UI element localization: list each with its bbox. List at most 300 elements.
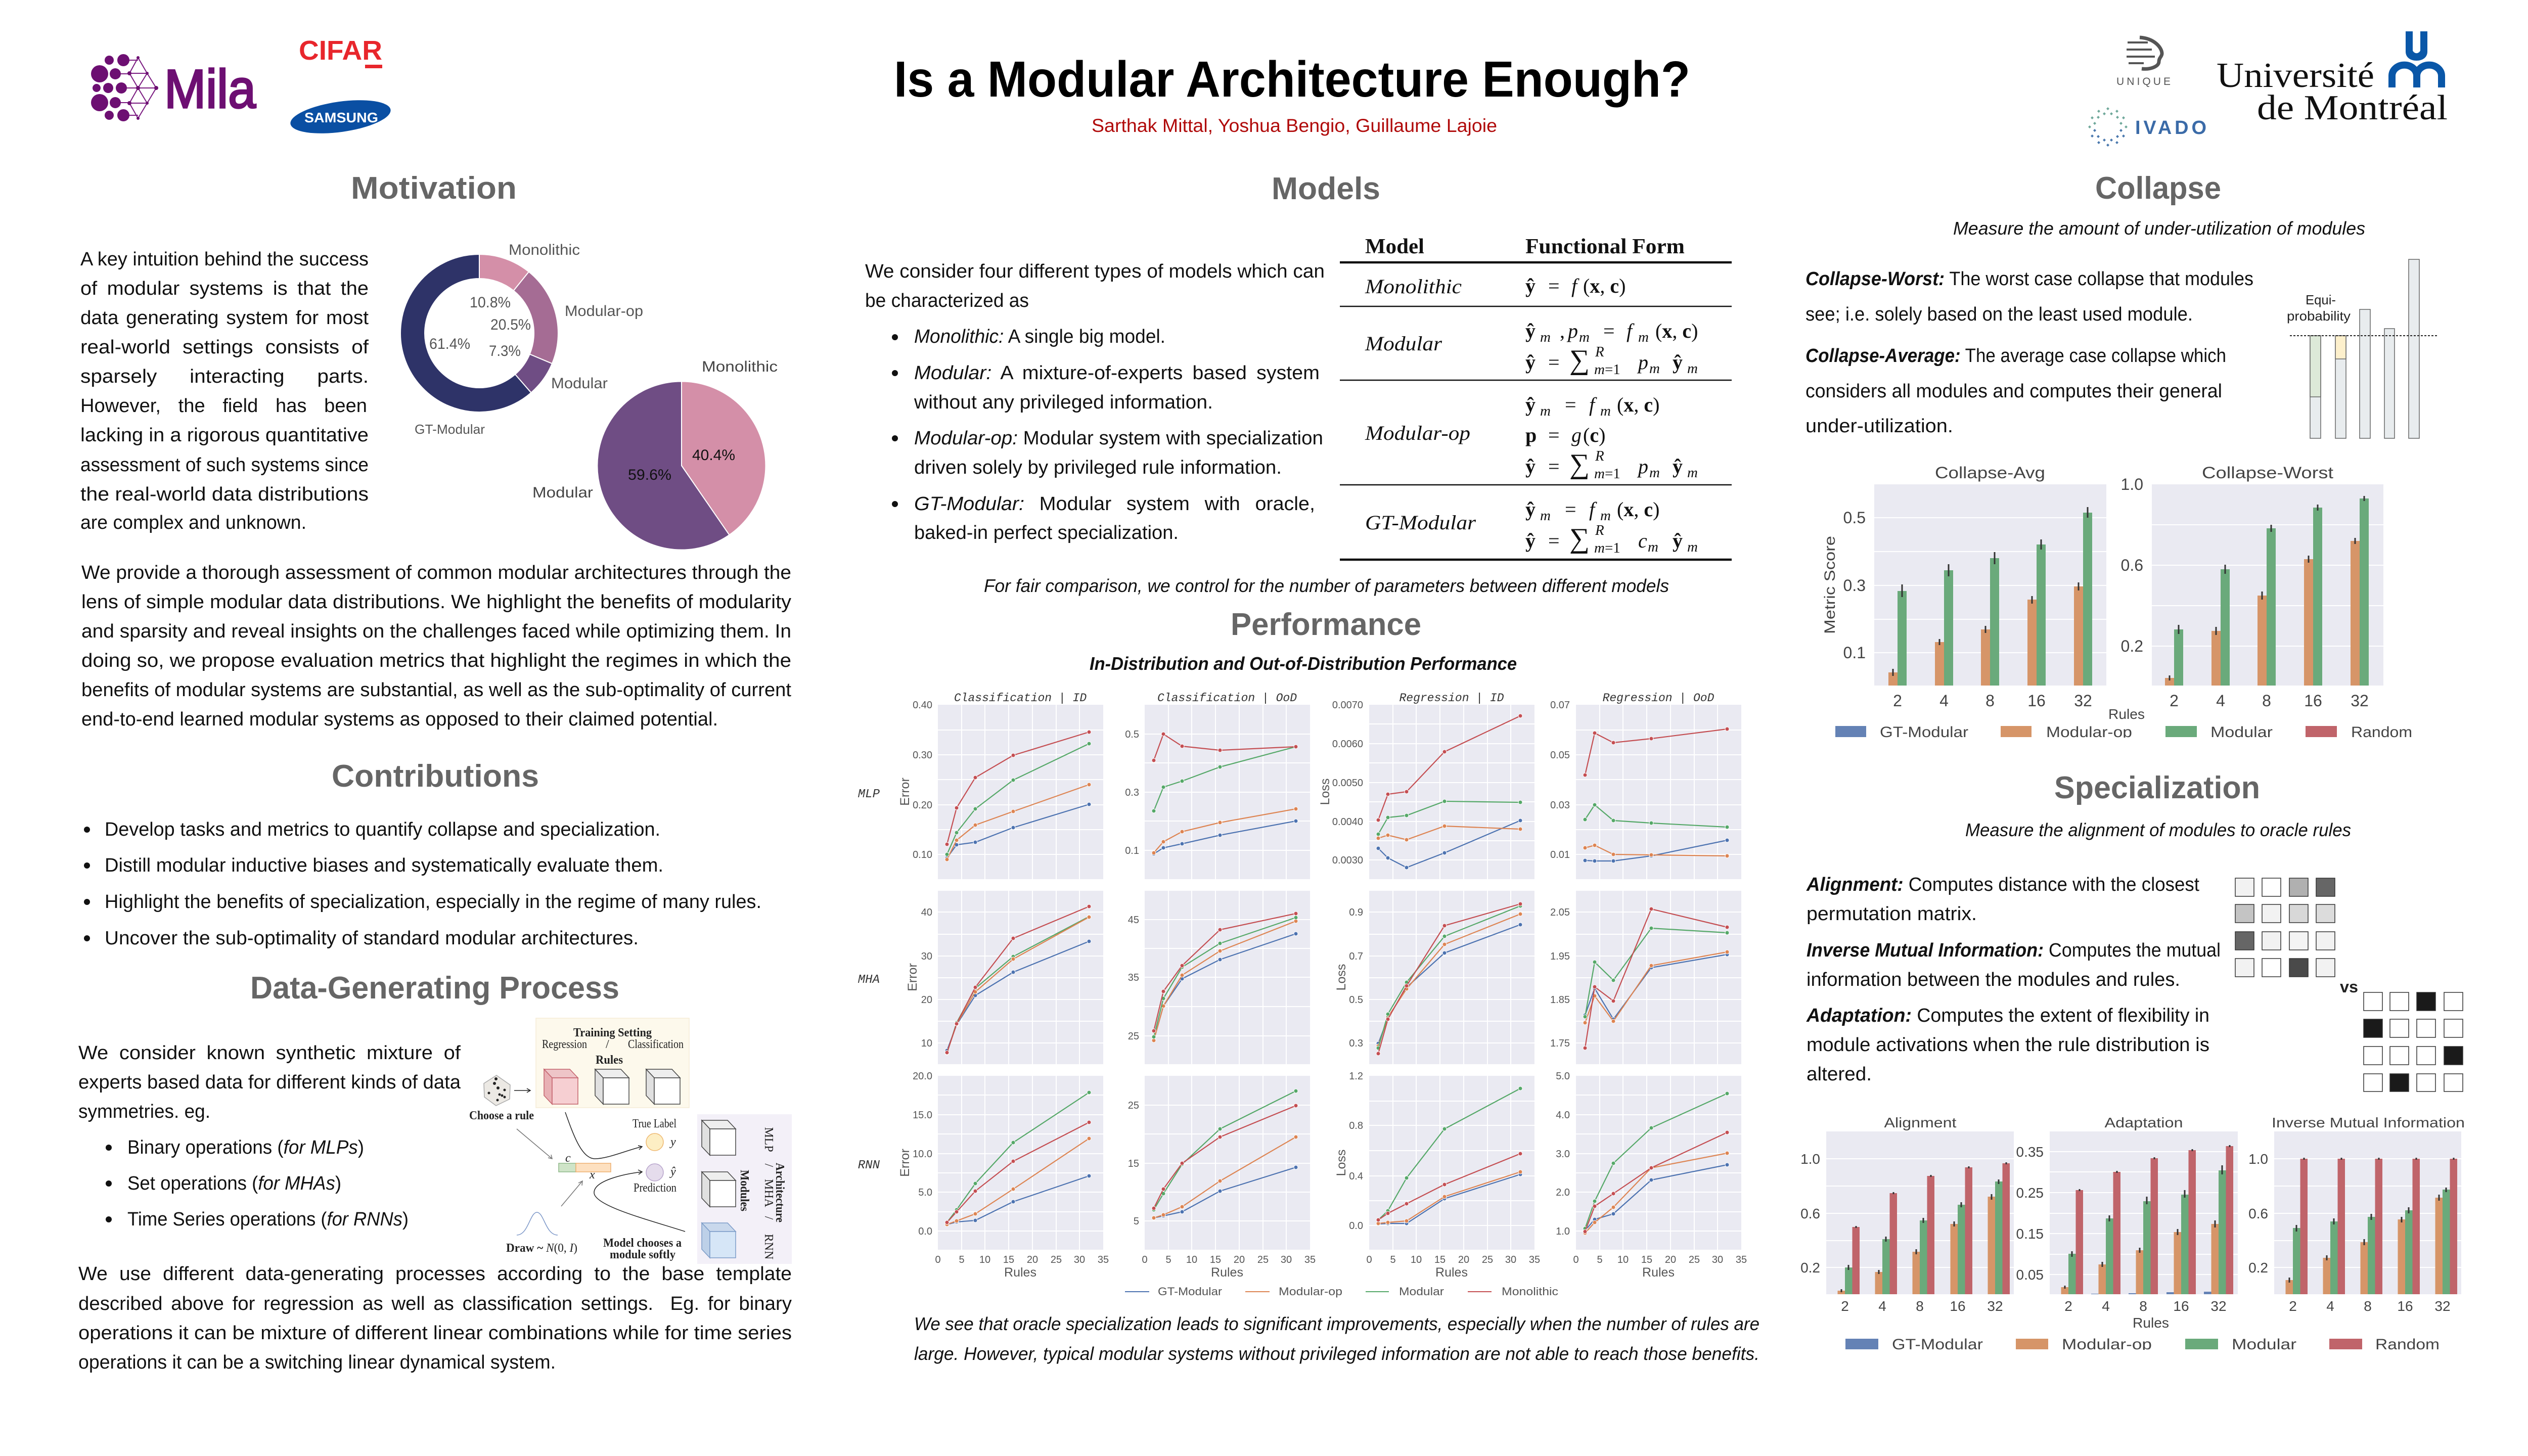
- text block: models description: Modular: A mixture-of-experts based system: [914, 362, 1320, 384]
- chart: RNN classification OoD: 25: [1128, 1100, 1139, 1111]
- chart: Collapse-Worst: 8: [2262, 692, 2271, 710]
- chart: Collapse-Worst: 0.2: [2121, 637, 2143, 655]
- chart: RNN classification OoD: 5: [1134, 1216, 1139, 1227]
- text block: models description: baked-in perfect specialization.: [914, 522, 1179, 543]
- text block: DGP details: operations it can be mixture of different linear combinations while for time series: [78, 1323, 792, 1344]
- text block: specialization definitions: [1806, 874, 2221, 1085]
- bullet list: contributions: Highlight the benefits of specialization, especially in the regime of many rules.: [105, 891, 761, 913]
- formula: modular-op: =: [1548, 424, 1560, 446]
- formula: modular-op: m: [1649, 465, 1660, 481]
- text block: motivation intro: [80, 249, 369, 533]
- chart: donut of module usage: GT-Modular: [415, 422, 485, 437]
- formula: modular-op: p: [1525, 424, 1537, 446]
- diagram: equi-probability bars: Equi-: [2306, 292, 2336, 307]
- chart: MLP regression OoD: 0.07: [1550, 700, 1570, 711]
- row label: MHA: MHA: [858, 973, 880, 987]
- panel: architecture modules: Architecture: [773, 1163, 786, 1222]
- formula: modular: [1525, 320, 1698, 378]
- chart: Collapse-Avg: 2: [1893, 692, 1902, 710]
- arrow: die to rules: [514, 1088, 530, 1093]
- chart: Alignment: 8: [1916, 1298, 1924, 1314]
- chart: RNN regression ID: 5: [1390, 1254, 1396, 1265]
- chart: Alignment: 0.2: [1800, 1260, 1820, 1276]
- formula: modular: (: [1655, 320, 1662, 342]
- chart: gaussian: [517, 1212, 558, 1235]
- chart: RNN regression ID: 35: [1529, 1254, 1540, 1265]
- formula: modular: ŷ: [1673, 351, 1683, 374]
- diagram: data generating process: [469, 1018, 792, 1264]
- text block: models description: GT-Modular: Modular system with oracle,: [914, 493, 1315, 515]
- formula: modular-op: ŷ: [1525, 455, 1536, 478]
- chart: Collapse-Worst: [2121, 464, 2383, 710]
- formula: modular: ,: [1560, 320, 1565, 342]
- chart: Adaptation: 0.15: [2016, 1226, 2044, 1242]
- text block: motivation paragraph: [81, 562, 791, 730]
- chart: MLP regression ID: 0.0030: [1332, 855, 1363, 866]
- text block: models description: Modular-op: Modular system with specialization: [914, 428, 1323, 449]
- text block: DGP intro: Time Series operations (for RNNs): [127, 1209, 409, 1230]
- panel: training setting: Training Setting: [573, 1026, 652, 1039]
- chart: Adaptation: 0.35: [2016, 1144, 2044, 1160]
- chart: MLP classification ID: 0.40: [913, 700, 932, 711]
- text block: motivation paragraph: doing so, we propose evaluation metrics that highlight the regimes in which the: [81, 650, 791, 671]
- formula: GT-modular: ŷ: [1673, 529, 1683, 552]
- formula: modular-op: p: [1637, 455, 1648, 478]
- text block: models description: [865, 261, 1325, 543]
- chart: RNN classification ID: 35: [1098, 1254, 1109, 1265]
- chart: Collapse-Avg: 0.5: [1843, 509, 1866, 527]
- table: functional forms: Modular-op: [1365, 422, 1470, 444]
- chart: RNN classification OoD: [1128, 1076, 1316, 1280]
- chart: RNN classification OoD: 30: [1281, 1254, 1292, 1265]
- text block: motivation paragraph: end-to-end learned modular systems as opposed to their claimed potential.: [81, 709, 718, 730]
- chart: donut of module usage: Monolithic: [509, 242, 580, 258]
- formula: modular: f: [1627, 320, 1635, 342]
- chart: MLP regression OoD: 0.01: [1550, 849, 1570, 860]
- chart: MHA regression ID: 0.9: [1349, 907, 1363, 918]
- title: Is a Modular Architecture Enough?: [894, 51, 1690, 108]
- text block: motivation intro: real-world settings consists of: [80, 337, 369, 358]
- heading: Models: Models: [1272, 171, 1380, 206]
- panel: architecture modules: /: [762, 1164, 775, 1167]
- chart: MHA classification ID: 30: [921, 951, 932, 962]
- labels: true label and prediction: Prediction: [634, 1181, 676, 1195]
- chart: RNN regression OoD: 5: [1597, 1254, 1603, 1265]
- formula: modular: ∑: [1569, 344, 1590, 376]
- chart: MHA classification OoD: 25: [1128, 1031, 1139, 1042]
- chart: RNN classification ID: 20: [1027, 1254, 1038, 1265]
- chart: MLP regression OoD: 0.03: [1550, 800, 1570, 811]
- panel: architecture modules: Modules: [738, 1170, 751, 1211]
- formula: GT-modular: m: [1648, 539, 1658, 555]
- chart: RNN classification ID: 30: [1074, 1254, 1085, 1265]
- chart: MLP classification ID: [898, 692, 1103, 879]
- chart: MLP classification OoD: 0.5: [1125, 729, 1139, 740]
- chart: RNN regression ID: Loss: [1334, 1150, 1348, 1176]
- heading: Contributions: Contributions: [332, 759, 539, 794]
- chart: RNN classification ID: 10.0: [913, 1149, 932, 1160]
- chart: RNN classification OoD: 35: [1304, 1254, 1316, 1265]
- chart: MHA classification OoD: 35: [1128, 972, 1139, 983]
- arrows: flow to input and outputs: [517, 1112, 685, 1232]
- chart: Inverse Mutual Information: 16: [2397, 1298, 2413, 1314]
- chart: RNN regression OoD: 0: [1573, 1254, 1579, 1265]
- text block: motivation intro: sparsely interacting parts.: [80, 366, 369, 387]
- text block: DGP details: described above for regression as well as classification settings. Eg. for binary: [78, 1293, 792, 1314]
- text block: motivation intro: data generating system for most: [80, 307, 369, 329]
- chart: RNN regression OoD: 25: [1689, 1254, 1700, 1265]
- text block: models description: Monolithic: A single big model.: [914, 326, 1165, 347]
- text block: DGP intro: experts based data for different kinds of data: [78, 1072, 461, 1093]
- panel: training setting: Regression: [542, 1038, 587, 1051]
- legend: collapse charts: Random: [2351, 724, 2412, 741]
- text block: motivation intro: the real-world data distributions: [80, 484, 369, 505]
- legend: specialization charts: [1845, 1336, 2440, 1356]
- chart: Alignment: 16: [1950, 1298, 1966, 1314]
- chart: MHA classification ID: [906, 891, 1103, 1064]
- axis label: collapse rules: Rules: [2108, 706, 2145, 722]
- legend: collapse charts: [1835, 724, 2412, 744]
- chart: MHA regression ID: 0.7: [1349, 951, 1363, 962]
- chart: RNN regression OoD: 2.0: [1556, 1187, 1570, 1198]
- chart: RNN regression OoD: 35: [1736, 1254, 1747, 1265]
- chart: RNN classification ID: 5: [959, 1254, 965, 1265]
- logo: Université de Montréal: [2217, 31, 2448, 127]
- text block: DGP details: operations it can be a switching linear dynamical system.: [78, 1352, 556, 1373]
- formula: modular: m: [1638, 329, 1649, 345]
- text block: motivation intro: are complex and unknown.: [80, 512, 306, 533]
- formula: GT-modular: [1525, 498, 1698, 556]
- chart: MLP regression OoD: 0.05: [1550, 750, 1570, 761]
- chart: MHA regression OoD: [1550, 891, 1741, 1064]
- chart: Alignment: 4: [1878, 1298, 1886, 1314]
- chart: RNN classification ID: Rules: [1004, 1265, 1036, 1280]
- text block: motivation intro: assessment of such systems since: [80, 454, 369, 476]
- legend: line charts: GT-Modular: [1158, 1285, 1222, 1298]
- logo: Université de Montréal: de Montréal: [2257, 88, 2448, 127]
- chart: Inverse Mutual Information: 8: [2364, 1298, 2372, 1314]
- legend: line charts: Modular: [1399, 1285, 1444, 1298]
- chart: MHA classification OoD: 45: [1128, 915, 1139, 926]
- chart: pie of rule usage: 40.4%: [692, 447, 735, 464]
- chart: MHA regression OoD: 2.05: [1550, 907, 1570, 918]
- formula: GT-modular: R: [1595, 522, 1604, 538]
- logo: UNIQUE: UNIQUE: [2116, 76, 2171, 87]
- chart: RNN regression OoD: Rules: [1642, 1265, 1675, 1280]
- formula: modular-op: (: [1583, 424, 1590, 446]
- formula: modular-op: =: [1548, 455, 1560, 478]
- heading: Collapse: Collapse: [2095, 171, 2221, 206]
- chart: MHA regression OoD: 1.95: [1550, 951, 1570, 962]
- row label: RNN: RNN: [858, 1159, 880, 1172]
- chart: MLP regression ID: [1318, 692, 1534, 879]
- heading: Data-Generating Process: Data-Generating Process: [250, 971, 619, 1006]
- formula: modular: m: [1687, 360, 1698, 377]
- caption: performance takeaway: We see that oracle specialization leads to significant improvements, especially when the number of rules are: [914, 1313, 1759, 1334]
- chart: Inverse Mutual Information: 32: [2434, 1298, 2451, 1314]
- chart: RNN regression ID: 25: [1482, 1254, 1493, 1265]
- chart: RNN classification ID: 15.0: [913, 1110, 932, 1121]
- chart: MLP regression ID: 0.0070: [1332, 700, 1363, 711]
- formula: modular: m: [1649, 360, 1660, 377]
- text block: specialization definitions: altered.: [1807, 1064, 1872, 1085]
- formula: modular-op: =1: [1605, 466, 1620, 482]
- chart: Collapse-Worst: 32: [2351, 692, 2369, 710]
- chart: donut of module usage: 20.5%: [490, 316, 531, 333]
- label: model chooses a module softly: Model chooses a: [603, 1237, 682, 1250]
- text block: specialization definitions: Adaptation: Computes the extent of flexibility in: [1806, 1005, 2209, 1026]
- logo: IVADO: [2088, 107, 2206, 147]
- chart: MLP classification OoD: [1125, 692, 1310, 879]
- text block: motivation intro: However, the field has been: [80, 395, 367, 417]
- bullet list: contributions: Develop tasks and metrics to quantify collapse and specialization.: [105, 819, 660, 840]
- axis label: specialization rules: Rules: [2133, 1315, 2169, 1331]
- formula: modular-op: g: [1571, 424, 1582, 446]
- chart: Alignment: 32: [1987, 1298, 2003, 1314]
- formula: GT-modular: (: [1617, 498, 1623, 521]
- caption: performance takeaway: [914, 1313, 1759, 1364]
- labels: true label and prediction: ŷ: [669, 1165, 676, 1178]
- chart: RNN regression ID: 0.4: [1349, 1171, 1363, 1182]
- chart: RNN classification ID: Error: [898, 1149, 912, 1177]
- chart: MLP classification ID: Classification | ID: [954, 692, 1087, 705]
- chart: MLP classification ID: Error: [898, 778, 912, 806]
- chart: Collapse-Worst: 4: [2216, 692, 2225, 710]
- chart: Adaptation: 2: [2064, 1298, 2072, 1314]
- text block: motivation paragraph: We provide a thorough assessment of common modular architectures through the: [81, 562, 791, 583]
- text block: collapse definitions: considers all modules and computes their general: [1805, 381, 2222, 402]
- panel: Data-Generating Process: [78, 971, 792, 1373]
- chart: Alignment: Alignment: [1884, 1115, 1957, 1130]
- bullet list: contributions: Uncover the sub-optimality of standard modular architectures.: [105, 928, 639, 949]
- panel: Models: [865, 171, 1732, 596]
- chart: donut of module usage: Modular-op: [565, 303, 643, 320]
- chart: RNN regression OoD: 5.0: [1556, 1071, 1570, 1082]
- chart: Collapse-Worst: 16: [2304, 692, 2322, 710]
- formula: modular: m: [1579, 329, 1590, 345]
- text block: collapse definitions: Collapse-Worst: The worst case collapse that modules: [1805, 268, 2253, 290]
- chart: Inverse Mutual Information: 0.6: [2248, 1206, 2268, 1221]
- logo: Samsung: [288, 95, 393, 139]
- chart: RNN classification ID: 5.0: [918, 1187, 932, 1198]
- row label: MLP: MLP: [858, 788, 880, 801]
- logo: CIFAR: CIFAR: [299, 35, 382, 66]
- chart: donut of module usage: Modular: [551, 375, 608, 392]
- labels: true label and prediction: y: [669, 1135, 676, 1149]
- chart: RNN regression OoD: 3.0: [1556, 1149, 1570, 1160]
- input vector: c and x: x: [589, 1168, 595, 1181]
- chart: pie of rule usage: Monolithic: [702, 358, 778, 375]
- chart: RNN regression ID: 30: [1505, 1254, 1516, 1265]
- chart: RNN regression ID: Rules: [1435, 1265, 1468, 1280]
- text block: motivation intro: of modular systems is that the: [80, 278, 369, 299]
- chart: MHA regression OoD: 1.75: [1550, 1038, 1570, 1049]
- text block: DGP intro: Set operations (for MHAs): [127, 1173, 341, 1194]
- label: model chooses a module softly: [603, 1237, 682, 1261]
- chart: RNN regression OoD: 4.0: [1556, 1110, 1570, 1121]
- panel: training setting: [536, 1018, 689, 1108]
- chart: RNN classification ID: 15: [1003, 1254, 1014, 1265]
- chart: RNN regression ID: [1334, 1071, 1540, 1280]
- chart: MLP classification OoD: 0.3: [1125, 787, 1139, 798]
- chart: RNN regression ID: 1.2: [1349, 1071, 1363, 1082]
- formula: modular-op: m: [1540, 403, 1551, 419]
- chart: RNN classification ID: 25: [1051, 1254, 1062, 1265]
- formula: modular-op: m: [1594, 466, 1605, 482]
- heading: Specialization: Specialization: [2054, 770, 2260, 805]
- chart: MLP classification OoD: Classification | OoD: [1157, 692, 1297, 705]
- legend: collapse charts: Modular: [2210, 724, 2273, 741]
- panel: Collapse: [1805, 171, 2439, 744]
- legend: specialization charts: Modular-op: [2062, 1336, 2152, 1353]
- formula: modular-op: c): [1590, 424, 1605, 446]
- panel: Contributions: [84, 759, 761, 949]
- table: functional forms: Model: [1365, 235, 1424, 258]
- chart: MLP regression OoD: [1550, 692, 1741, 879]
- panel: architecture modules: MHA: [762, 1179, 775, 1208]
- chart: MHA regression ID: 0.5: [1349, 994, 1363, 1006]
- chart: donut of module usage: 61.4%: [429, 336, 470, 352]
- logo: UNIQUE: [2116, 37, 2171, 87]
- text block: motivation intro: lacking in a rigorous quantitative: [80, 425, 369, 446]
- chart: RNN regression ID: 0: [1366, 1254, 1372, 1265]
- panel: architecture modules: MLP: [762, 1127, 775, 1152]
- text block: specialization definitions: module activations when the rule distribution is: [1807, 1034, 2209, 1056]
- chart: pie of rule usage: [532, 358, 778, 550]
- chart: MHA classification ID: Error: [906, 963, 920, 991]
- formula: modular: ŷ: [1525, 351, 1536, 374]
- chart: RNN classification OoD: Rules: [1211, 1265, 1243, 1280]
- formula: modular: x, c): [1662, 320, 1698, 342]
- formula: modular-op: x, c): [1623, 393, 1659, 416]
- chart: RNN classification ID: 10: [979, 1254, 990, 1265]
- chart: Inverse Mutual Information: [2248, 1115, 2465, 1314]
- chart: RNN classification OoD: 15: [1128, 1158, 1139, 1169]
- formula: modular: ŷ: [1525, 320, 1536, 342]
- table: functional forms: GT-Modular: [1365, 511, 1476, 534]
- subheading: collapse: Measure the amount of under-utilization of modules: [1953, 218, 2365, 239]
- bullet list: contributions: Distill modular inductive biases and systematically evaluate them.: [105, 855, 663, 876]
- formula: modular: p: [1637, 351, 1648, 374]
- chart: Inverse Mutual Information: 4: [2326, 1298, 2334, 1314]
- logo: Université de Montréal: Université: [2217, 56, 2374, 95]
- formula: modular: =1: [1605, 361, 1620, 378]
- chart: RNN regression OoD: 10: [1617, 1254, 1629, 1265]
- text block: DGP intro: We consider known synthetic mixture of: [78, 1042, 461, 1064]
- formula: GT-modular: m: [1540, 508, 1551, 524]
- chart: Collapse-Avg: Metric Score: [1822, 536, 1838, 634]
- panel: architecture modules: RNN: [762, 1234, 775, 1259]
- chart: MHA regression ID: [1334, 891, 1534, 1064]
- logo: IVADO: IVADO: [2135, 117, 2206, 139]
- chart: RNN classification ID: 0.0: [918, 1226, 932, 1237]
- formula: GT-modular: m: [1687, 539, 1698, 555]
- chart: Adaptation: Adaptation: [2104, 1115, 2183, 1130]
- text block: motivation paragraph: lens of simple modular data distributions. We highlight the benefits of modularity: [81, 592, 791, 613]
- chart: MLP regression ID: 0.0040: [1332, 816, 1363, 828]
- formula: modular-op: ∑: [1569, 448, 1590, 480]
- chart: Adaptation: [2016, 1115, 2238, 1314]
- diagram: equi-probability bars: probability: [2287, 308, 2351, 324]
- chart: Collapse-Avg: 4: [1939, 692, 1949, 710]
- note: fair comparison: For fair comparison, we control for the number of parameters between different models: [984, 575, 1669, 596]
- chart: MLP classification ID: 0.20: [913, 800, 932, 811]
- chart: Collapse-Avg: 32: [2074, 692, 2092, 710]
- chart: RNN regression ID: 0.0: [1349, 1220, 1363, 1232]
- formula: GT-modular: m: [1600, 508, 1611, 524]
- panel: Specialization: [1800, 770, 2465, 1356]
- input vector: c and x: c: [565, 1152, 571, 1165]
- legend: line charts: Monolithic: [1502, 1285, 1558, 1298]
- formula: GT-modular: ŷ: [1525, 498, 1536, 521]
- chart: RNN classification ID: [898, 1071, 1109, 1280]
- chart: RNN regression OoD: 1.0: [1556, 1226, 1570, 1237]
- chart: Inverse Mutual Information: 1.0: [2248, 1151, 2268, 1167]
- chart: RNN regression ID: 15: [1434, 1254, 1446, 1265]
- formula: GT-modular: ŷ: [1525, 529, 1536, 552]
- table: functional forms: Functional Form: [1525, 235, 1685, 258]
- chart: RNN classification OoD: 15: [1210, 1254, 1221, 1265]
- formula: monolithic: f: [1571, 275, 1579, 297]
- formula: GT-modular: ∑: [1569, 523, 1590, 554]
- legend: line charts: [1125, 1285, 1558, 1298]
- legend: collapse charts: GT-Modular: [1880, 724, 1968, 741]
- text block: DGP details: [78, 1263, 792, 1373]
- formula: modular-op: f: [1589, 393, 1597, 416]
- logo: Mila: [91, 54, 256, 121]
- formula: modular: =: [1603, 320, 1615, 342]
- chart: MHA regression ID: Loss: [1334, 964, 1348, 990]
- chart: Collapse-Avg: [1822, 464, 2106, 710]
- text block: specialization definitions: Alignment: Computes distance with the closest: [1806, 874, 2199, 895]
- text block: models description: We consider four different types of models which can: [865, 261, 1325, 282]
- text block: collapse definitions: see; i.e. solely based on the least used module.: [1805, 304, 2193, 325]
- chart: RNN regression ID: 10: [1411, 1254, 1422, 1265]
- chart: RNN regression OoD: 30: [1712, 1254, 1723, 1265]
- table: functional forms: Monolithic: [1365, 275, 1462, 298]
- legend: specialization charts: Modular: [2232, 1336, 2296, 1353]
- text block: specialization definitions: Inverse Mutual Information: Computes the mutual: [1807, 940, 2221, 961]
- chart: donut of module usage: 10.8%: [470, 294, 511, 311]
- chart: Collapse-Avg: Collapse-Avg: [1935, 464, 2045, 482]
- formula: monolithic: x, c): [1590, 275, 1626, 297]
- formula: modular-op: ŷ: [1525, 393, 1536, 416]
- chart: Inverse Mutual Information: 2: [2289, 1298, 2297, 1314]
- formula: modular: =: [1548, 351, 1560, 374]
- text block: models description: be characterized as: [865, 290, 1029, 311]
- caption: performance takeaway: large. However, typical modular systems without privileged information are not able to reach those benefits.: [914, 1343, 1759, 1364]
- heading: Motivation: Motivation: [351, 171, 517, 206]
- formula: GT-modular: m: [1594, 540, 1605, 556]
- chart: pie of rule usage: Modular: [532, 484, 593, 501]
- chart: Collapse-Avg: 0.3: [1843, 576, 1866, 595]
- chart: MHA classification ID: 10: [921, 1038, 932, 1049]
- formula: modular-op: R: [1595, 448, 1604, 464]
- formula: GT-modular: f: [1589, 498, 1597, 521]
- logo: Mila: Mila: [164, 58, 256, 119]
- chart: MHA classification OoD: [1128, 891, 1310, 1064]
- table: functional forms: [1340, 235, 1732, 560]
- formula: monolithic: ŷ: [1525, 275, 1536, 297]
- formula: modular-op: [1525, 393, 1698, 482]
- chart: RNN classification OoD: 25: [1257, 1254, 1269, 1265]
- chart: RNN classification ID: 20.0: [913, 1071, 932, 1082]
- chart: MLP classification ID: 0.30: [913, 750, 932, 761]
- panel: training setting: Classification: [628, 1038, 684, 1051]
- chart: MLP classification ID: 0.10: [913, 849, 932, 860]
- text block: specialization definitions: permutation matrix.: [1807, 903, 1977, 925]
- chart: Inverse Mutual Information: 0.2: [2248, 1260, 2268, 1276]
